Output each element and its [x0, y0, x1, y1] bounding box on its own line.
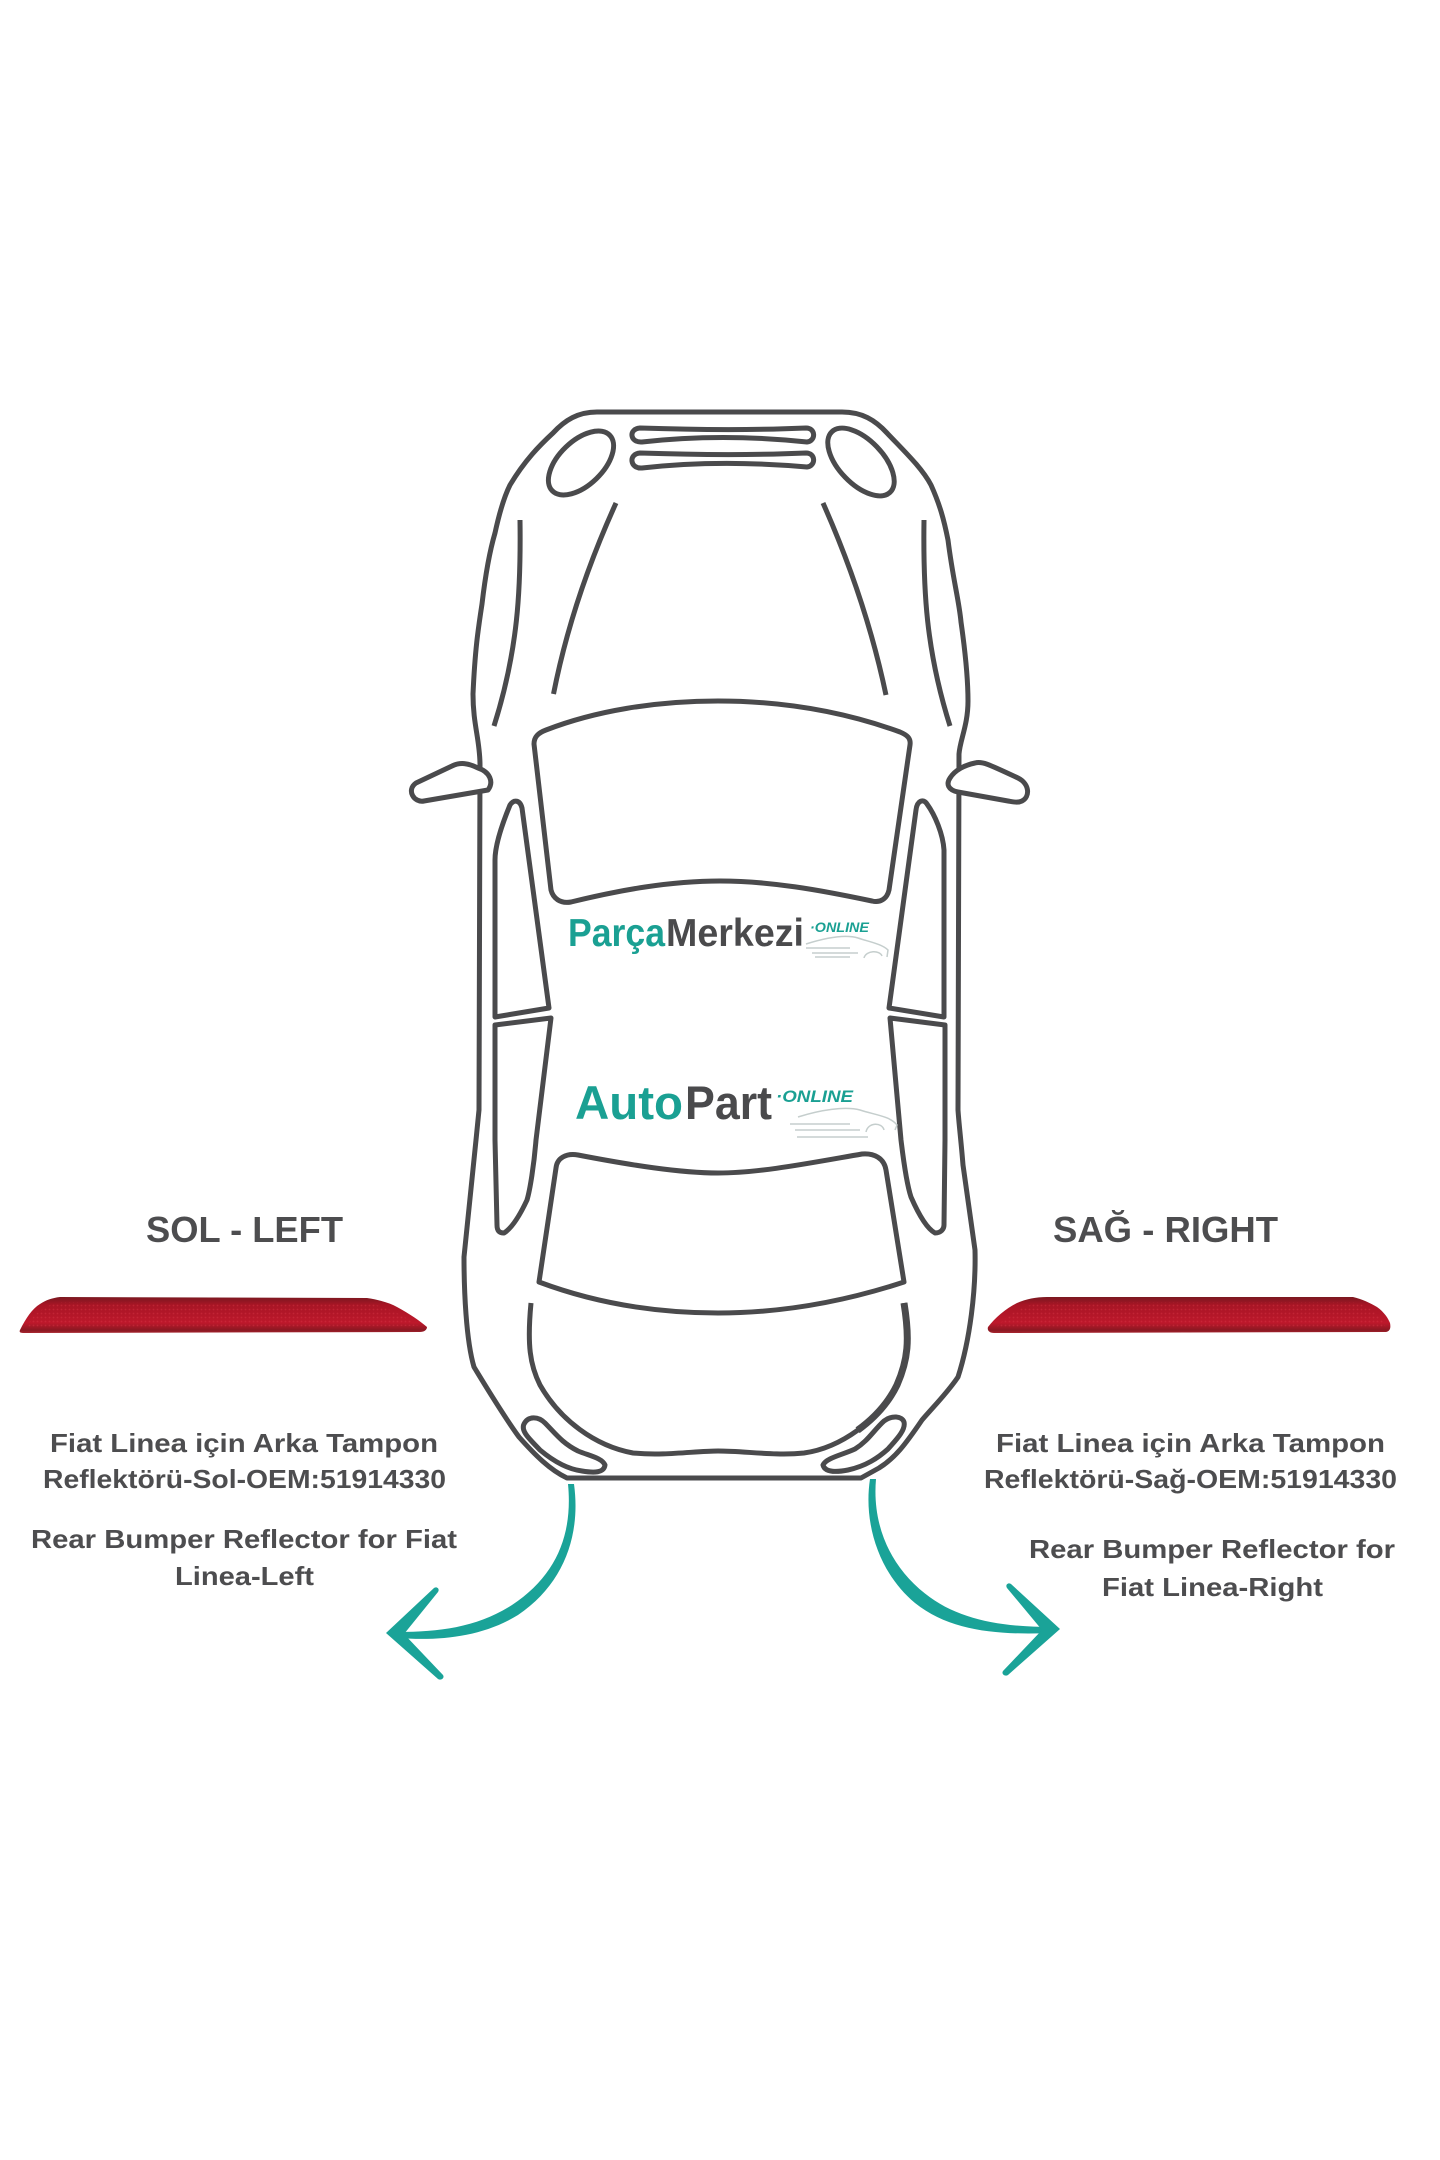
left tail lamp: [523, 1418, 605, 1472]
left hood line: [554, 503, 616, 694]
heading: SAĞ - RIGHT: SAĞ - RIGHT: [1053, 1209, 1278, 1250]
Turkish product description: Reflektörü-Sağ-OEM:51914330: [984, 1464, 1397, 1494]
heading: SOL - LEFT: SOL - LEFT: [146, 1209, 343, 1250]
Turkish product description: Fiat Linea için Arka Tampon: [996, 1428, 1385, 1458]
logo car swoosh: [790, 1108, 897, 1137]
left panel: SOL - LEFT: [20, 1209, 457, 1591]
arrow: left bumper corner to left reflector: [386, 1484, 576, 1680]
Turkish product description: [984, 1428, 1397, 1494]
logo word Parça: Parça: [568, 912, 665, 955]
right tail lamp: [823, 1417, 904, 1471]
Turkish product description: Fiat Linea için Arka Tampon: [50, 1428, 438, 1458]
upper grille slot: [632, 428, 814, 442]
Turkish product description: Reflektörü-Sol-OEM:51914330: [43, 1464, 446, 1494]
right hood line: [823, 503, 886, 695]
right fender line: [924, 520, 950, 726]
Turkish product description: [43, 1428, 446, 1494]
product image: right reflector: [988, 1297, 1390, 1333]
rear window: [539, 1154, 904, 1313]
lower grille slot: [632, 453, 814, 468]
windshield: [534, 701, 910, 902]
right panel: SAĞ - RIGHT: [984, 1209, 1397, 1602]
logo word Part: Part: [685, 1076, 772, 1129]
English product description: [31, 1524, 457, 1591]
arrow: right bumper corner to right reflector: [868, 1479, 1060, 1676]
English product description: Fiat Linea-Right: [1102, 1572, 1323, 1602]
left front side window: [495, 801, 549, 1017]
logo word Merkezi: Merkezi: [666, 912, 804, 955]
English product description: Rear Bumper Reflector for Fiat: [31, 1524, 457, 1554]
left rear side window: [495, 1018, 551, 1233]
logo suffix online: ·ONLINE: [776, 1087, 854, 1106]
logo word Auto: Auto: [575, 1076, 683, 1129]
right mirror: [948, 762, 1028, 802]
English product description: Linea-Left: [175, 1561, 314, 1591]
car body: [464, 412, 975, 1478]
logo: AutoPart online: [575, 1076, 897, 1137]
logo: ParçaMerkezi online: [568, 912, 888, 958]
right headlamp: [816, 417, 906, 507]
right front side window: [889, 801, 944, 1017]
trunk right thick edge: [858, 1303, 907, 1430]
right rear side window: [890, 1018, 945, 1233]
left fender line: [494, 520, 520, 726]
logo car swoosh: [806, 936, 888, 958]
English product description: [1029, 1534, 1395, 1602]
English product description: Rear Bumper Reflector for: [1029, 1534, 1395, 1564]
trunk lid line: [529, 1303, 907, 1454]
car outline, top view: [411, 412, 1028, 1478]
product image: left reflector: [20, 1297, 427, 1333]
left headlamp: [537, 419, 625, 507]
left mirror: [411, 764, 491, 801]
logo suffix online: ·ONLINE: [810, 919, 870, 935]
